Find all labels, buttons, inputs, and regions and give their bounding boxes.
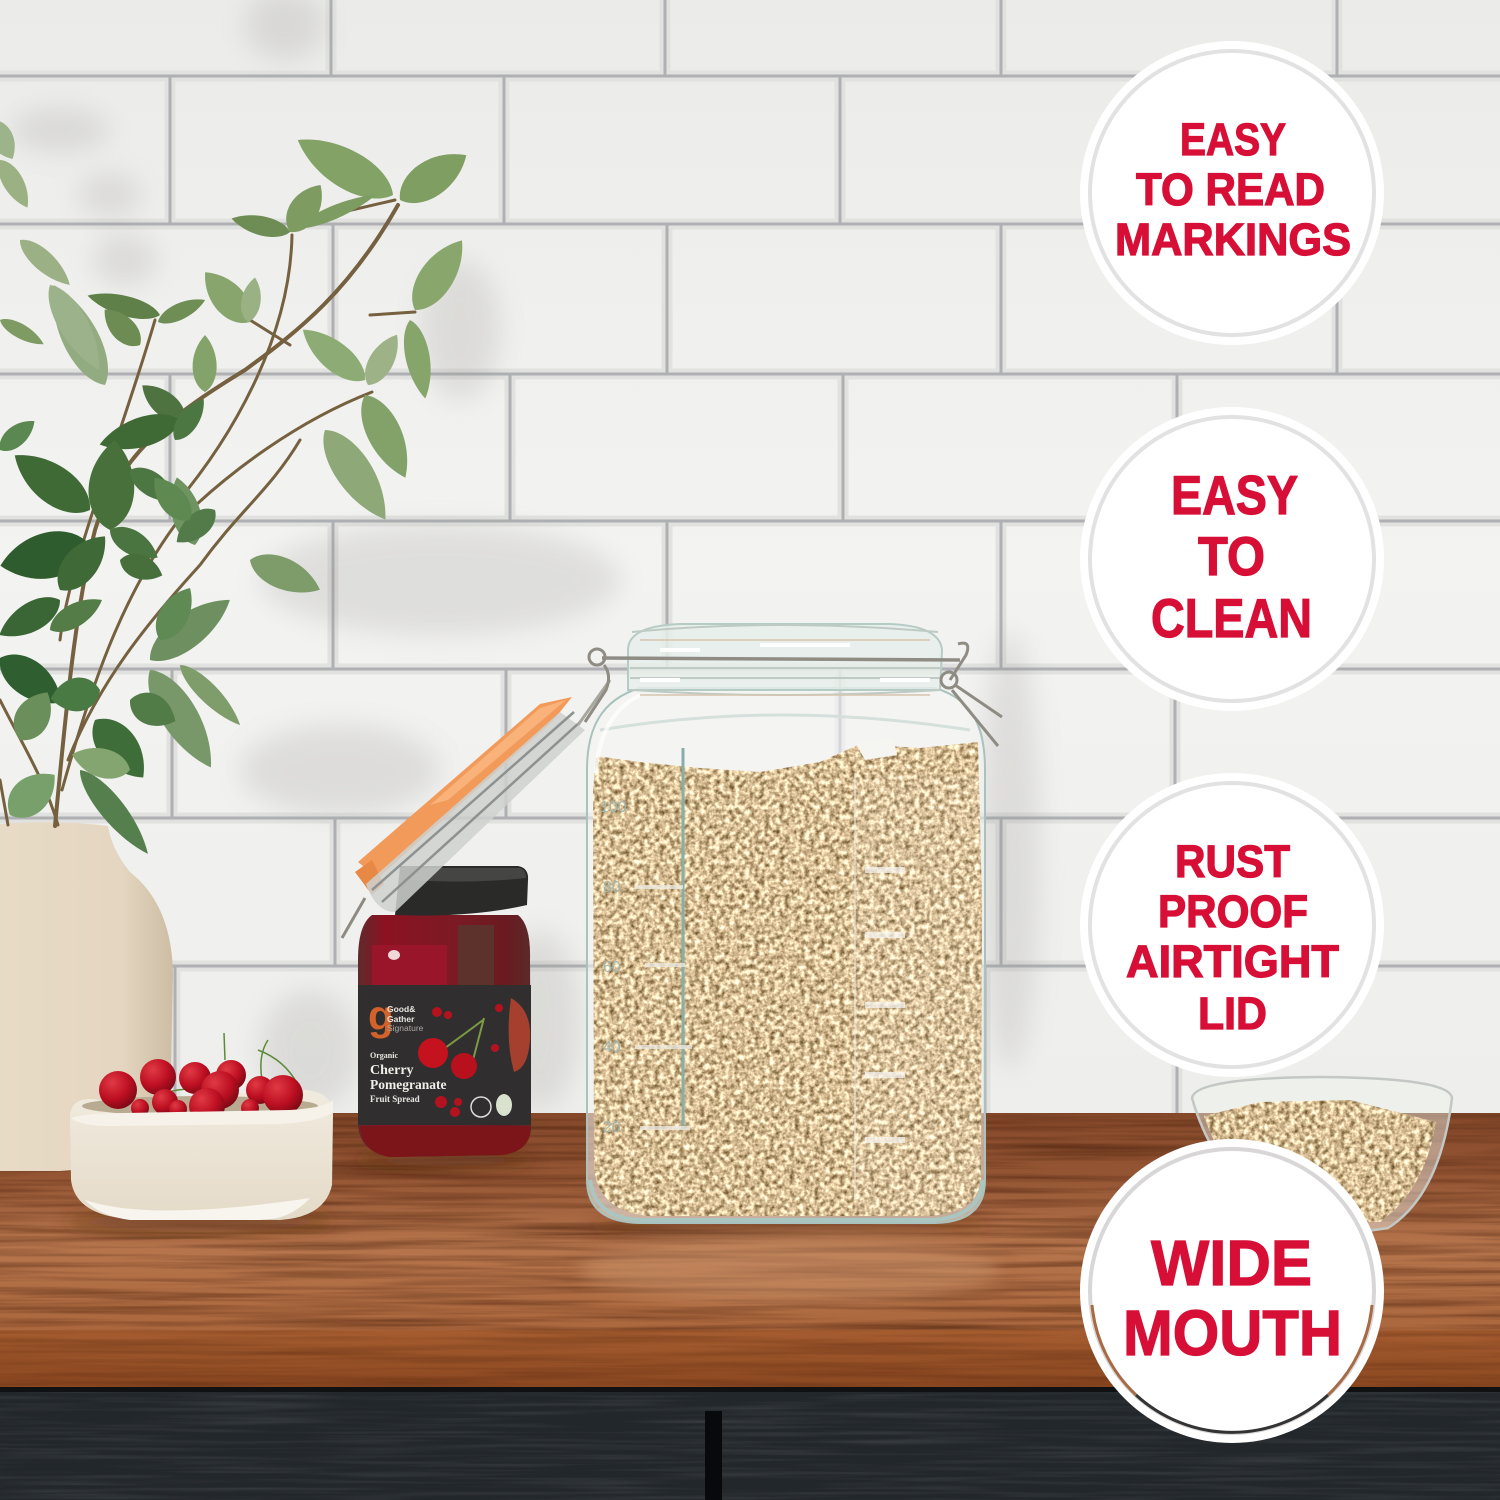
- jar label: Gather: [387, 1014, 415, 1024]
- jar label: Fruit Spread: [370, 1094, 420, 1104]
- jar label: Organic: [370, 1051, 398, 1060]
- oats fill: [585, 735, 990, 1225]
- wall shadows: [10, 0, 1040, 1110]
- measurement markings: 40: [603, 1039, 621, 1056]
- badge: rust proof airtight lid: RUST: [1175, 836, 1290, 887]
- plant leaves: [0, 114, 476, 861]
- badge: rust proof airtight lid: [1080, 773, 1384, 1077]
- jar neck and rim: [628, 624, 942, 690]
- ceramic vase: [0, 822, 173, 1171]
- jar cap: [395, 866, 528, 916]
- badge: wide mouth: WIDE: [1151, 1227, 1312, 1299]
- wooden countertop: [0, 1113, 1500, 1388]
- badge: rust proof airtight lid: LID: [1198, 988, 1267, 1039]
- jar label: Cherry: [370, 1063, 414, 1078]
- measurement markings: 100: [600, 799, 627, 816]
- badge: wide mouth: MOUTH: [1123, 1297, 1342, 1369]
- jar rim highlights: [596, 695, 640, 772]
- jam jar: [358, 866, 531, 1157]
- jar label: Signature: [387, 1023, 424, 1033]
- counter reflections: [65, 1153, 1000, 1302]
- jar body glass: [587, 688, 985, 1223]
- cherries: [99, 1059, 303, 1124]
- jar label: Pomegranate: [370, 1077, 446, 1092]
- jar label: g: [368, 992, 394, 1039]
- plant stems: [0, 200, 415, 826]
- jar label: [358, 985, 531, 1125]
- badge: wide mouth: [1080, 1139, 1384, 1443]
- dark cabinet: [0, 1387, 1500, 1500]
- measurement markings: 20: [603, 1119, 621, 1136]
- wire clasp: [585, 643, 1002, 746]
- measurement markings: [600, 738, 905, 1200]
- badge: easy to read markings: TO READ: [1136, 164, 1325, 215]
- badge: rust proof airtight lid: PROOF: [1158, 886, 1308, 937]
- open jar lid: [342, 680, 610, 938]
- glass bowl of oats: [1192, 1077, 1452, 1232]
- tiled wall: [0, 0, 1500, 1120]
- badge: easy to clean: TO: [1198, 525, 1265, 587]
- badge: rust proof airtight lid: AIRTIGHT: [1126, 936, 1339, 987]
- large glass jar: [585, 624, 1002, 1225]
- badge: easy to read markings: MARKINGS: [1115, 214, 1351, 265]
- badge: easy to clean: [1080, 407, 1384, 711]
- badge: easy to read markings: [1080, 41, 1384, 345]
- badge: easy to read markings: EASY: [1180, 114, 1286, 165]
- jar label: Good&: [387, 1004, 415, 1014]
- measurement markings: 80: [603, 879, 621, 896]
- measurement markings: 60: [603, 959, 621, 976]
- cherries bowl: [70, 1033, 333, 1220]
- badge: easy to clean: EASY: [1171, 464, 1298, 526]
- badge: easy to clean: CLEAN: [1151, 587, 1312, 649]
